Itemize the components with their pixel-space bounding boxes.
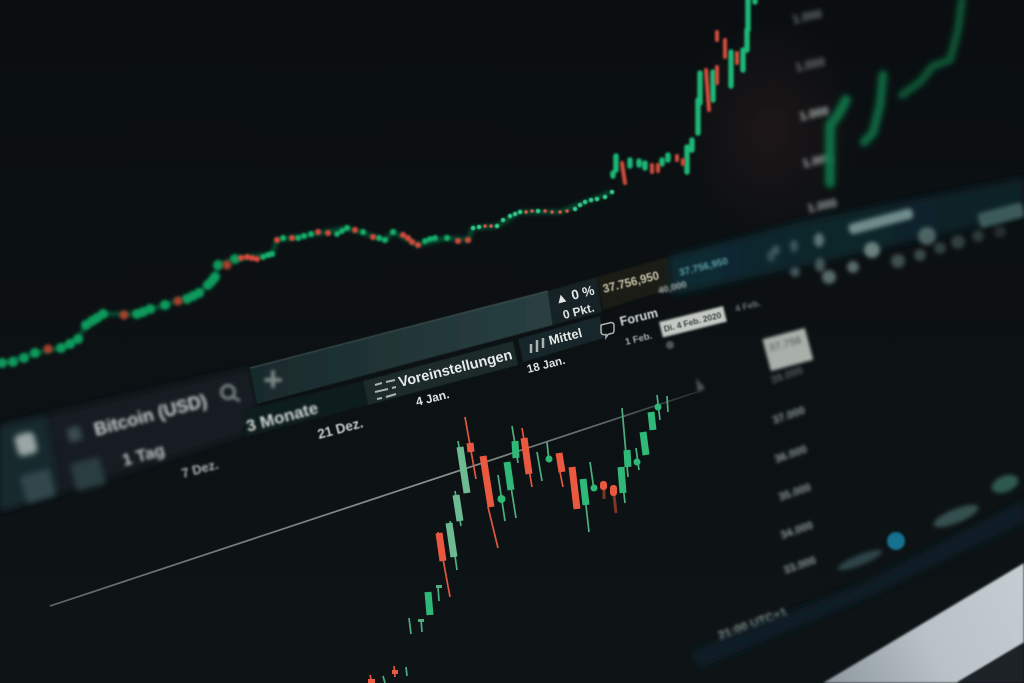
axis label lower 4: 34.000 [779,520,815,542]
candles right red [485,211,567,226]
heading: Bitcoin: Bitcoin (USD) [92,391,209,440]
date box fill [659,306,727,338]
toolbar: settings tile [363,341,518,405]
date box text: Di. 4 Feb. 2020 [663,310,723,334]
label: price: 37.756,950 [602,270,661,296]
label: 1 Feb.: 1 Feb. [624,331,653,348]
green candle dots [418,404,662,622]
blurred right toolbar icons [767,202,1024,284]
marker below date box [666,341,674,349]
label: 40,000: 40,000 [657,279,688,297]
bottom band [690,500,1024,668]
right toolbar label [848,207,914,235]
label: Voreinstellungen: Voreinstellungen [397,347,514,391]
label: 18 Jan.: 18 Jan. [526,355,567,376]
cursor marker [696,378,705,393]
label: 4 Feb.: 4 Feb. [734,298,762,314]
bottom toolbar [690,471,1024,668]
toolbar: timeframe tile [243,381,368,437]
green candle bodies pale [449,447,467,557]
icon: speech bubble [601,322,614,338]
blue dot [887,532,905,550]
green chart path third [902,0,962,95]
candlestick chart [368,395,668,683]
toolbar: change tile [548,277,602,325]
label: 7 Dez.: 7 Dez. [180,457,220,481]
red candle dim wicks [604,490,616,513]
candles left red [48,265,227,349]
monitor body dark corner [957,643,1024,683]
icon: crosshair [266,372,280,386]
icon: search [222,386,240,401]
red candle bodies [439,438,577,561]
toolbar: chart icon tile [0,417,58,510]
icon: blurred app tile [13,431,39,457]
label: 21 Dez.: 21 Dez. [316,415,365,442]
candles right green [473,192,612,228]
axis label 5: 1.000 [806,196,839,216]
axis label lower 1: 37.000 [771,405,807,427]
toolbar icons and labels left [13,256,762,503]
axis label 4: 1.000 [801,151,834,171]
green candle bodies bright [428,412,653,615]
icon: blurred tile lower [20,469,56,503]
axis label lower 0: 39.000 [769,365,805,387]
candles middle green [263,228,447,257]
right icons column [767,233,825,277]
price box text: 37.756 [768,334,803,355]
price box fill [762,328,813,371]
toolbar: left dim section [0,368,257,512]
axis label lower 2: 36.000 [773,444,809,466]
axis label 1: 1.000 [791,7,824,27]
trend line [50,392,697,606]
red small candles [368,481,617,683]
monitor bezel white [823,563,1024,683]
green candle wicks [383,395,668,683]
label: 0 Pkt.: 0 Pkt. [561,301,596,322]
spike candles green [613,0,755,176]
toolbar: candle type tile [518,316,604,362]
price label box [762,328,813,371]
blurred green chart right [830,0,962,183]
right toolbar far label [977,202,1024,228]
date highlight box [659,306,727,338]
label: price teal: 37.756,950 [678,256,730,279]
icon: blurred cross [66,426,83,443]
candles middle red [241,230,468,259]
right round buttons [822,226,1006,284]
label: 1 Tag: 1 Tag [120,440,167,470]
green chart path second [864,75,883,142]
label: Forum: Forum [618,306,659,329]
label: percent change: ▲ 0 % [553,283,596,307]
axis label lower 3: 35.000 [777,482,813,504]
label: 4 Jan.: 4 Jan. [414,387,451,409]
axis label 3: 1.000 [798,104,831,124]
candles left green: large out of focus [2,259,235,363]
bottom band blurred items [836,471,1021,574]
red candle wicks [370,417,563,683]
toolbar: bright drawing block [250,291,553,404]
icon: sliders [375,380,396,399]
blurred price axis lower [716,365,818,643]
bottom-left axis label: 21:00 UTC+1 [716,605,789,643]
spike candles red [622,32,737,183]
green chart path [830,100,846,183]
icon: candles [531,338,543,353]
faint reddish glow on screen [680,20,860,240]
label: Mittel: Mittel [547,325,584,348]
icon: blurred tile second [70,457,106,491]
connecting glow under left candles [0,192,612,364]
toolbar: block highlight edge [250,291,548,368]
axis label 2: 1.000 [794,55,827,75]
label: 3 Monate: 3 Monate [244,398,320,436]
toolbar: price tile [597,257,672,310]
blurred price axis upper [791,7,839,216]
toolbar band [0,178,1024,512]
axis label lower 5: 33.000 [782,555,818,577]
top line of candles [0,0,755,364]
toolbar: teal right band [668,178,1024,295]
